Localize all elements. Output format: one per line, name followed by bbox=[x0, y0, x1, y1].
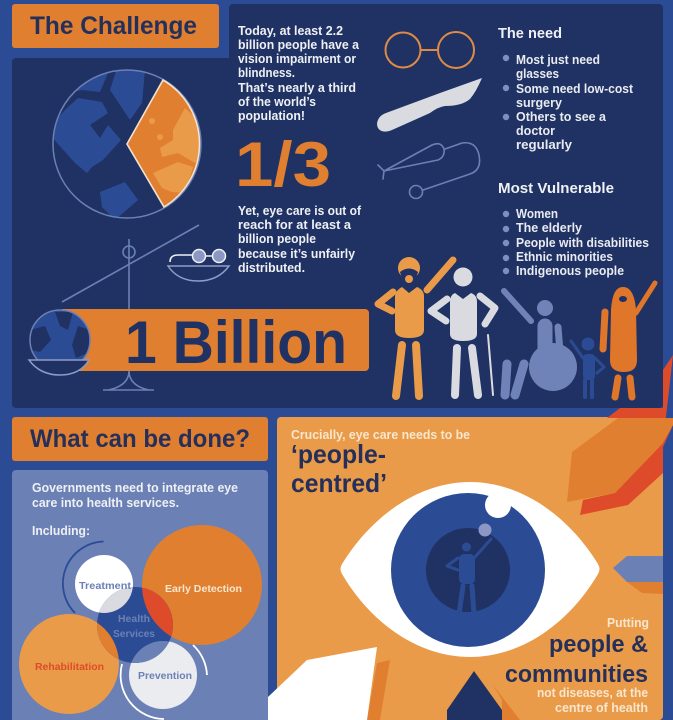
text block: governments bbox=[32, 480, 238, 538]
text block: vision impairment statistic bbox=[238, 23, 360, 123]
label: prevention: Prevention bbox=[138, 670, 192, 682]
big number: one third: 1/3 bbox=[235, 130, 331, 200]
figure: person in wheelchair bbox=[504, 291, 577, 395]
label: health services: Services bbox=[113, 628, 155, 640]
list: the need: Most just need bbox=[516, 53, 600, 67]
text block: eye care out of reach: because it’s unfairly bbox=[238, 246, 356, 261]
text block: eye care out of reach: billion people bbox=[238, 231, 316, 246]
text block: governments: Including: bbox=[32, 523, 90, 538]
text: putting people and communities: communities bbox=[505, 661, 648, 688]
icon: stethoscope bbox=[378, 143, 480, 198]
balance scale stand and beam bbox=[62, 225, 199, 390]
text block: eye care out of reach: Yet, eye care is out of bbox=[238, 203, 362, 218]
list: most vulnerable: Indigenous people bbox=[516, 264, 624, 278]
figure reflected in pupil bbox=[447, 539, 491, 614]
illustration: eye bbox=[340, 482, 600, 657]
scale pan: globe bbox=[29, 310, 90, 375]
figure: elderly man with cane bbox=[431, 268, 495, 395]
icon: globe with one third highlighted bbox=[50, 68, 205, 220]
figure: man with turban bbox=[378, 257, 453, 396]
text block: vision impairment statistic: That’s nearly a third bbox=[238, 80, 356, 95]
heading: the challenge bbox=[12, 4, 219, 48]
text block: vision impairment statistic: blindness. bbox=[238, 65, 295, 80]
banner: 1 billion: 1 Billion bbox=[125, 309, 347, 376]
text block: vision impairment statistic: billion people have a bbox=[238, 37, 360, 52]
text block: governments: Governments need to integrate eye bbox=[32, 480, 238, 495]
panel: people-centred bbox=[277, 417, 663, 720]
list: the need: regularly bbox=[516, 138, 572, 152]
text: putting people and communities: centre of health bbox=[555, 700, 648, 715]
decorative arrow: red and orange at top right bbox=[567, 355, 673, 515]
heading: the challenge: The Challenge bbox=[30, 12, 197, 40]
list: the need: surgery bbox=[516, 96, 562, 110]
scale pan: glasses bbox=[168, 250, 229, 281]
decorative arrow: white pointer with orange shadow bbox=[268, 647, 390, 720]
text block: vision impairment statistic: population! bbox=[238, 108, 305, 123]
panel: what can be done bbox=[12, 470, 268, 720]
label: early detection: Early Detection bbox=[165, 583, 242, 595]
text block: vision impairment statistic: vision impairment or bbox=[238, 51, 356, 66]
list: the need: Others to see a bbox=[516, 110, 607, 124]
list: most vulnerable: Ethnic minorities bbox=[516, 250, 613, 264]
list: the need: Some need low-cost bbox=[516, 82, 634, 96]
text block: eye care out of reach: distributed. bbox=[238, 260, 305, 275]
heading: the need: The need bbox=[498, 25, 562, 42]
panel: the challenge background bbox=[12, 4, 663, 408]
text block: eye care out of reach: reach for at least a bbox=[238, 217, 352, 232]
label: health services: Health bbox=[118, 613, 150, 625]
label: rehabilitation: Rehabilitation bbox=[35, 661, 104, 673]
list: most vulnerable: The elderly bbox=[516, 221, 582, 235]
heading: most vulnerable: Most Vulnerable bbox=[498, 180, 614, 197]
text: crucially heading: centred’ bbox=[291, 468, 387, 498]
list: the need bbox=[503, 53, 634, 152]
icon: glasses bbox=[386, 32, 474, 68]
list: the need: doctor bbox=[516, 124, 555, 138]
text: crucially heading: ‘people- bbox=[291, 439, 386, 469]
venn diagram: health services bbox=[19, 525, 262, 719]
text: putting people and communities: people & bbox=[549, 631, 648, 658]
text block: eye care out of reach bbox=[238, 203, 362, 275]
text block: vision impairment statistic: of the world’s bbox=[238, 94, 316, 109]
text: putting people and communities: Putting bbox=[607, 615, 649, 630]
text block: vision impairment statistic: Today, at least 2.2 bbox=[238, 23, 343, 38]
figure: woman in hooded robe bbox=[603, 283, 655, 397]
icon: scalpel bbox=[377, 78, 482, 132]
figure: child bbox=[571, 338, 604, 397]
decorative arrow: navy pointer with orange shadow bbox=[447, 671, 520, 720]
decorative arrow: periwinkle pointer bbox=[613, 556, 663, 594]
list: the need: glasses bbox=[516, 67, 559, 81]
text: crucially heading: Crucially, eye care needs to be bbox=[291, 427, 470, 442]
list: most vulnerable: Women bbox=[516, 207, 558, 221]
text: crucially heading bbox=[291, 427, 470, 498]
list: most vulnerable: People with disabilities bbox=[516, 236, 649, 250]
text: putting people and communities: not diseases, at the bbox=[537, 685, 648, 700]
text: putting people and communities bbox=[505, 615, 649, 715]
label: health services bbox=[113, 613, 155, 640]
text block: governments: care into health services. bbox=[32, 495, 179, 510]
list: most vulnerable bbox=[503, 207, 649, 278]
heading: what can be done bbox=[12, 417, 268, 461]
heading: what can be done: What can be done? bbox=[30, 425, 250, 453]
label: treatment: Treatment bbox=[79, 580, 132, 592]
